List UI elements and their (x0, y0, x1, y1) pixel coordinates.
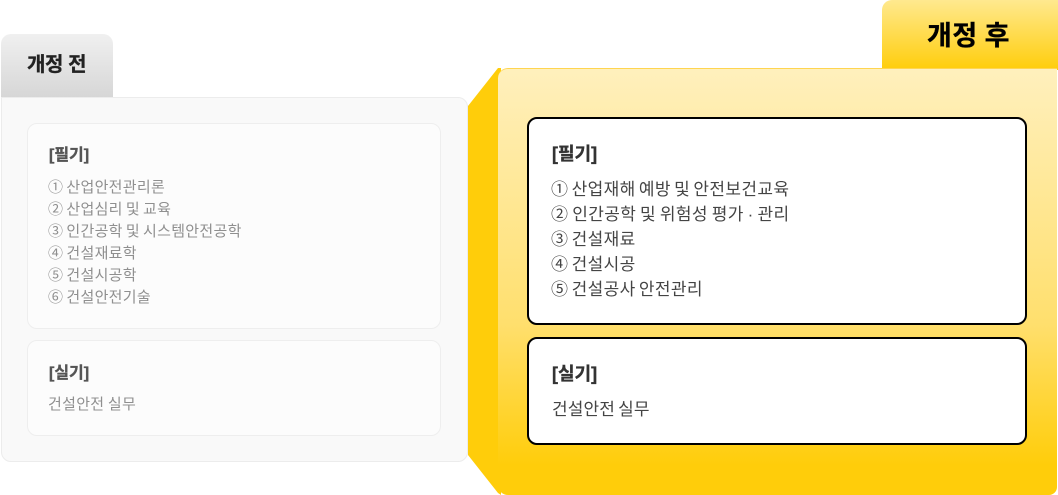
connector wedge (468, 68, 501, 495)
card: practical exam after (527, 337, 1027, 445)
heading: practical exam before: [실기] (49, 365, 89, 382)
card: written exam before (27, 123, 441, 329)
heading: written exam before: [필기] (49, 147, 89, 164)
tab: before revision (1, 34, 113, 98)
subject list before: ① 산업안전관리론 (48, 179, 165, 196)
subject list before (48, 179, 242, 306)
heading: written exam after: [필기] (552, 144, 597, 164)
subject list before: ② 산업심리 및 교육 (48, 201, 171, 218)
tab label: after revision: 개정 후 (927, 21, 1010, 51)
practical subject before: 건설안전 실무 (48, 396, 136, 413)
tab: after revision (882, 0, 1058, 70)
heading: practical exam after: [실기] (552, 364, 597, 384)
subject list after: ② 인간공학 및 위험성 평가 · 관리 (551, 205, 789, 224)
subject list after: ③ 건설재료 (551, 230, 636, 249)
subject list after (551, 180, 789, 299)
subject list before: ③ 인간공학 및 시스템안전공학 (48, 223, 242, 240)
subject list after: ⑤ 건설공사 안전관리 (551, 280, 703, 299)
subject list before: ④ 건설재료학 (48, 245, 137, 262)
card: practical exam before (27, 340, 441, 436)
tab label: before revision: 개정 전 (27, 54, 86, 76)
panel: after revision (498, 68, 1057, 495)
subject list after: ① 산업재해 예방 및 안전보건교육 (551, 180, 789, 199)
practical subject after: 건설안전 실무 (552, 400, 650, 419)
subject list before: ⑤ 건설시공학 (48, 267, 137, 284)
panel: before revision (1, 97, 468, 462)
subject list after: ④ 건설시공 (551, 255, 636, 274)
card: written exam after (527, 117, 1027, 325)
subject list before: ⑥ 건설안전기술 (48, 289, 151, 306)
